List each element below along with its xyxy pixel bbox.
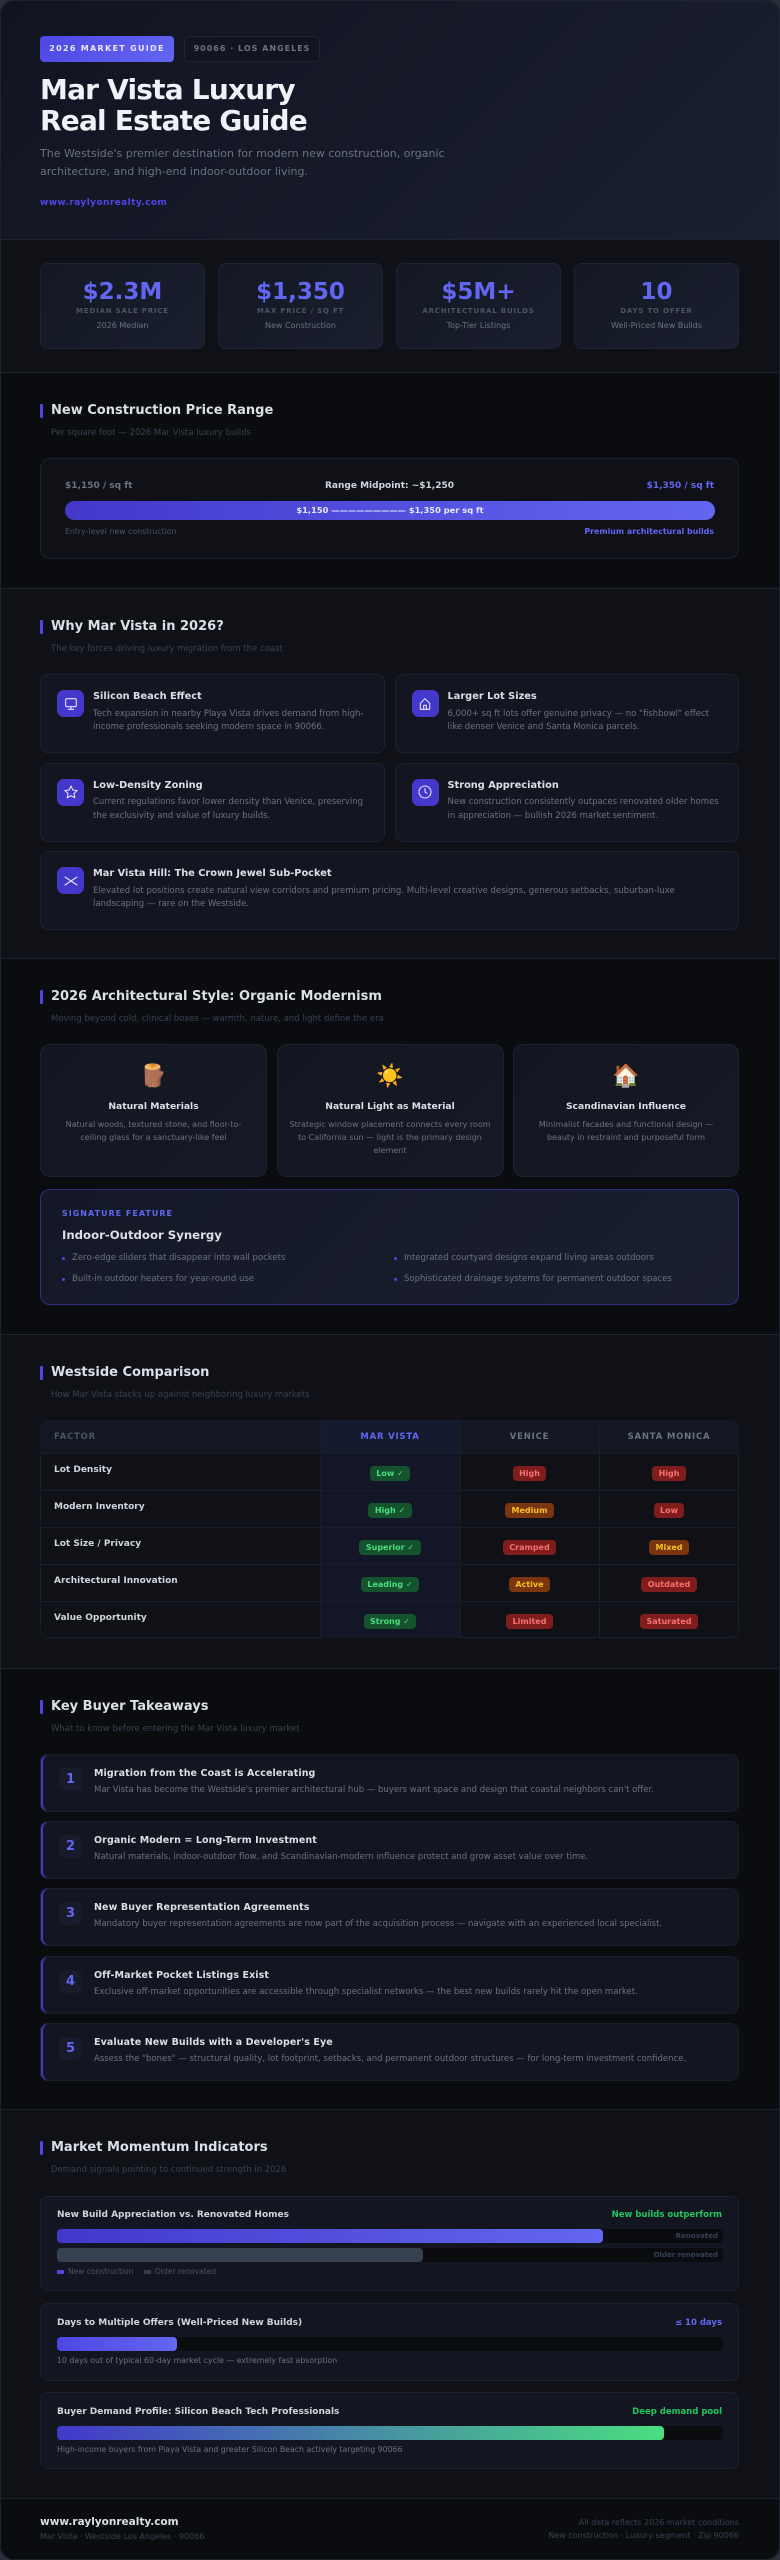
card: natural materials [40,1044,267,1177]
comparison table [40,1420,739,1638]
takeaway 4: Off-Market Pocket Listings Exist [94,1970,269,1981]
card: silicon beach effect: income professionals seeking modern space in 90066. [93,722,324,732]
card: days to multiple offers: 10 days out of typical 60-day market cycle — extremely fast absorption [57,2356,337,2365]
heading: New Construction Price Range [51,403,273,418]
row: modern inventory [54,1502,684,1518]
badge: 2026 market guide: 2026 MARKET GUIDE [49,44,165,53]
takeaway 4 [40,1956,739,2014]
card: strong appreciation: Strong Appreciation [448,780,559,790]
row: modern inventory: High ✓ [375,1506,405,1515]
hero header [0,0,780,239]
card: buyer demand profile: Deep demand pool [632,2407,722,2417]
row: value opportunity: Value Opportunity [54,1613,147,1623]
card: silicon beach effect: Tech expansion in nearby Playa Vista drives demand from high- [93,708,363,718]
row: lot size and privacy: Mixed [655,1543,682,1552]
stat: median sale price: $2.3M [83,279,162,305]
row: lot size and privacy: Superior ✓ [366,1543,414,1552]
card: natural light: element [374,1146,406,1155]
row: modern inventory: Medium [512,1506,547,1515]
row: architectural innovation: Architectural Innovation [54,1576,178,1586]
row: lot density: High [519,1469,540,1478]
takeaway 2: 2 [66,1839,75,1854]
card: appreciation comparison: New builds outperform [612,2210,722,2220]
row: lot size and privacy: Lot Size / Privacy [54,1539,141,1549]
footer website: www.raylyonrealty.com [40,2516,179,2528]
stat: days to offer: DAYS TO OFFER [620,307,693,315]
card: buyer demand profile: Buyer Demand Profile: Silicon Beach Tech Professionals [57,2407,339,2417]
stats row [0,239,780,372]
takeaway 3: Mandatory buyer representation agreements are now part of the acquisition process — navigate with an experienced local specialist. [94,1919,662,1929]
takeaway 5 [40,2023,739,2081]
range bar: $1,150 ————————— $1,350 per sq ft [296,505,484,515]
row: value opportunity [54,1613,698,1629]
heading [40,619,283,654]
stat: median sale price: 2026 Median [96,321,148,330]
badge: location: 90066 · LOS ANGELES [194,44,310,53]
icon: house: 🏠 [612,1064,640,1089]
title [40,73,307,137]
feature list: Zero-edge sliders that disappear into wall pockets [72,1253,285,1263]
takeaway 2: Organic Modern = Long-Term Investment [94,1835,317,1846]
bar: new construction [57,2229,723,2243]
card: mar vista hill [40,851,739,930]
stat: median sale price: MEDIAN SALE PRICE [76,307,169,315]
card: low-density zoning [40,762,384,842]
takeaway 1: 1 [66,1772,75,1787]
card: scandinavian influence [513,1044,739,1177]
bar: demand [57,2426,723,2440]
heading [40,989,384,1024]
card: strong appreciation: New construction consistently outpaces renovated older homes [448,797,719,807]
heading: Market Momentum Indicators [51,2140,268,2155]
stat: architectural builds: ARCHITECTURAL BUILDS [422,307,535,315]
heading: Key Buyer Takeaways [51,1699,208,1714]
heading: Demand signals pointing to continued strength in 2026 [51,2165,286,2175]
card: scandinavian influence: Minimalist facades and functional design — [539,1120,713,1129]
footer [0,2498,780,2560]
header row: FACTOR [54,1432,96,1442]
card: scandinavian influence: Scandinavian Influence [566,1101,686,1112]
card: appreciation comparison: New Build Appreciation vs. Renovated Homes [57,2210,289,2220]
card: natural light: to California sun — light is the primary design [298,1133,482,1142]
heading: How Mar Vista stacks up against neighboring luxury markets [51,1390,310,1400]
row: lot density: High [659,1469,679,1478]
price range card [40,458,739,559]
heading: Why Mar Vista in 2026? [51,619,224,634]
row: value opportunity: Limited [513,1617,546,1626]
stat: max price per sq ft: New Construction [265,321,336,330]
stat: architectural builds: $5M+ [441,279,516,305]
badge: 2026 market guide [40,36,174,62]
row: architectural innovation: Active [515,1580,544,1589]
card: mar vista hill: Elevated lot positions create natural view corridors and premium pricing. Multi-level creative designs, generous setbacks, suburban-luxe [93,886,675,896]
heading: What to know before entering the Mar Vista luxury market [51,1724,300,1734]
row: value opportunity: Saturated [646,1617,692,1626]
card: larger lot sizes: 6,000+ sq ft lots offer genuine privacy — no "fishbowl" effect [448,708,709,718]
bar: new construction: Renovated [676,2232,718,2240]
card: days to multiple offers: ≤ 10 days [675,2318,722,2328]
title: Real Estate Guide [40,104,307,137]
stat: max price per sq ft: MAX PRICE / SQ FT [257,307,344,315]
heading: Westside Comparison [51,1365,209,1380]
section: key buyer takeaways [0,1668,780,2109]
icon: monitor [57,690,84,717]
header row [54,1432,710,1442]
section: why mar vista [0,588,780,958]
card: silicon beach effect: Silicon Beach Effect [93,691,202,702]
range bar [65,501,715,520]
row: architectural innovation: Leading ✓ [367,1580,413,1589]
entry caption: Entry-level new construction [65,527,177,536]
low label: $1,150 / sq ft [65,481,132,491]
takeaway 5: Assess the "bones" — structural quality, lot footprint, setbacks, and permanent outdoor structures — for long-term investment confidence. [94,2054,686,2064]
card: strong appreciation [394,762,739,842]
feature list: Sophisticated drainage systems for permanent outdoor spaces [404,1274,672,1284]
card: natural materials: ceiling glass for a sanctuary-like feel [80,1133,227,1142]
row: architectural innovation [54,1576,697,1592]
card: natural materials: Natural Materials [108,1101,199,1112]
takeaway 5: Evaluate New Builds with a Developer's Eye [94,2037,333,2048]
card: larger lot sizes [394,674,739,753]
card: natural materials: Natural woods, textured stone, and floor-to- [66,1120,241,1129]
stat: architectural builds: Top-Tier Listings [447,321,510,330]
feature list: Built-in outdoor heaters for year-round use [72,1274,254,1284]
footer notes: All data reflects 2026 market conditions [579,2518,739,2526]
card: larger lot sizes: Larger Lot Sizes [448,691,537,702]
heading [40,1365,310,1400]
card: low-density zoning: the exclusivity and value of luxury builds. [93,811,270,821]
heading: Moving beyond cold, clinical boxes — warmth, nature, and light define the era [51,1014,384,1024]
card: natural light: Strategic window placement connects every room [289,1120,491,1129]
subtitle [40,147,445,178]
card: larger lot sizes: like denser Venice and Santa Monica parcels. [448,722,639,732]
bar: days [57,2337,723,2351]
title: Mar Vista Luxury [40,73,295,106]
section: westside comparison [0,1334,780,1668]
subtitle: The Westside's premier destination for modern new construction, organic [40,147,445,160]
high label: $1,350 / sq ft [647,481,714,491]
row: architectural innovation: Outdated [648,1580,690,1589]
takeaway 4: 4 [66,1974,75,1989]
takeaway 1: Mar Vista has become the Westside's premier architectural hub — buyers want space and design that coastal neighbors can't offer. [94,1785,654,1795]
website link: www.raylyonrealty.com [40,198,167,208]
icon: clock [412,778,438,806]
stat: days to offer [574,263,739,349]
takeaway 1: Migration from the Coast is Accelerating [94,1768,315,1779]
heading [40,2140,286,2175]
takeaway 1 [40,1754,739,1812]
stat: architectural builds [396,263,561,349]
card: mar vista hill: landscaping — rare on the Westside. [93,899,249,909]
stat: days to offer: Well-Priced New Builds [611,321,702,330]
takeaway 5: 5 [66,2041,75,2056]
icon: star [57,778,84,806]
icon: crossed lines [57,867,84,894]
icon: house [412,690,438,717]
bar: older renovated [57,2248,723,2262]
footer notes [548,2518,739,2540]
subtitle: architecture, and high-end indoor-outdoor living. [40,165,308,178]
card: days to multiple offers [40,2303,739,2381]
card: low-density zoning: Current regulations favor lower density than Venice, preserving [93,797,363,807]
takeaway 4: Exclusive off-market opportunities are accessible through specialist networks — the best new builds rarely hit the open market. [94,1987,638,1997]
card: natural light: Natural Light as Material [325,1101,455,1112]
legend: Older renovated [155,2267,216,2276]
card: appreciation comparison [40,2196,739,2291]
card: silicon beach effect [40,674,384,753]
row: lot density: Lot Density [54,1465,112,1475]
takeaway 3: 3 [66,1906,75,1921]
stat: max price per sq ft: $1,350 [256,279,345,305]
footer notes: New construction · Luxury segment · Zip 90066 [548,2531,739,2540]
row: lot size and privacy: Cramped [509,1543,550,1552]
header row: SANTA MONICA [628,1432,710,1442]
card: days to multiple offers: Days to Multiple Offers (Well-Priced New Builds) [57,2318,302,2328]
section: architectural style [0,958,780,1334]
stat: median sale price [40,263,205,349]
feature list: Integrated courtyard designs expand living areas outdoors [404,1253,654,1263]
heading [40,1699,300,1734]
row: value opportunity: Strong ✓ [370,1617,410,1626]
badge: location [184,36,320,62]
footer location: Mar Vista · Westside Los Angeles · 90066 [40,2532,204,2541]
section: market momentum [0,2109,780,2498]
card: natural light [276,1044,504,1177]
icon: sun: ☀️ [376,1064,404,1089]
panel title: Indoor-Outdoor Synergy [62,1228,222,1242]
card: scandinavian influence: beauty in restraint and purposeful form [547,1133,705,1142]
row: lot size and privacy [54,1539,689,1555]
row: modern inventory: Modern Inventory [54,1502,145,1512]
midpoint label: Range Midpoint: ~$1,250 [325,481,454,491]
heading: The key forces driving luxury migration from the coast [51,644,283,654]
bar: older renovated: Older renovated [654,2251,718,2259]
feature list [62,1253,672,1284]
heading: Per square foot — 2026 Mar Vista luxury builds [51,428,251,438]
takeaway 3 [40,1888,739,1946]
row: lot density [54,1465,686,1481]
stat: days to offer: 10 [640,279,672,305]
card: strong appreciation: in appreciation — bullish 2026 market sentiment. [448,811,658,821]
card: buyer demand profile: High-income buyers from Playa Vista and greater Silicon Beach actively targeting 90066 [57,2445,402,2454]
card: buyer demand profile [40,2392,739,2469]
card: low-density zoning: Low-Density Zoning [93,780,203,790]
row: modern inventory: Low [660,1506,678,1515]
legend: New construction [68,2267,133,2276]
takeaway 2: Natural materials, indoor-outdoor flow, and Scandinavian-modern influence protect and grow asset value over time. [94,1852,588,1862]
section: price range [0,372,780,588]
row: lot density: Low ✓ [376,1469,404,1478]
stat: max price per sq ft [218,263,383,349]
heading [40,403,273,438]
eyebrow: SIGNATURE FEATURE [62,1209,173,1218]
card: mar vista hill: Mar Vista Hill: The Crown Jewel Sub-Pocket [93,868,332,879]
heading: 2026 Architectural Style: Organic Modernism [51,989,382,1004]
takeaway 3: New Buyer Representation Agreements [94,1902,310,1913]
header row: MAR VISTA [360,1432,420,1442]
icon: wood: 🪵 [140,1064,167,1089]
premium caption: Premium architectural builds [584,527,714,536]
takeaway 2 [40,1821,739,1879]
signature feature panel [40,1189,739,1305]
header row: VENICE [510,1432,549,1442]
legend [57,2267,216,2276]
